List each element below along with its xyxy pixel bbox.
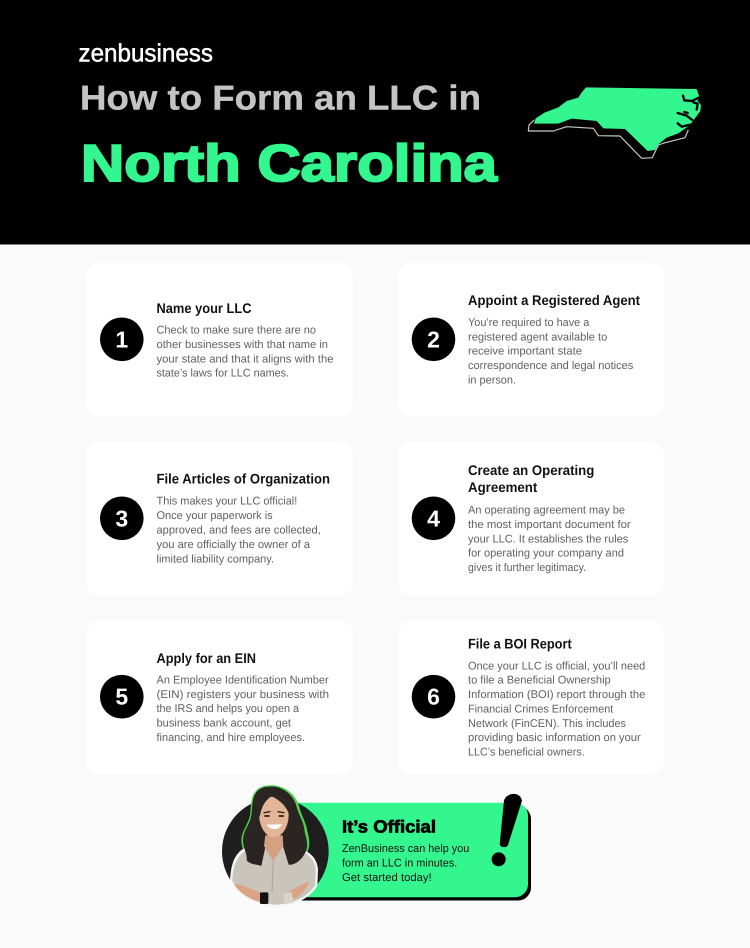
- step 2 body: in person.: [468, 374, 516, 386]
- callout text: form an LLC in minutes.: [342, 858, 457, 870]
- title line: How to Form an LLC in: How to Form an LLC in: [80, 79, 481, 117]
- step 4 body: your LLC. It establishes the rules: [468, 533, 629, 545]
- header panel: [0, 0, 750, 244]
- step 4 body: for operating your company and: [468, 548, 624, 560]
- step 4 body: An operating agreement may be: [468, 505, 625, 517]
- step 4 number: [412, 496, 455, 540]
- step 5 number: 5: [115, 684, 128, 710]
- step 5 card: [86, 620, 353, 774]
- step 5 body: (EIN) registers your business with: [156, 689, 329, 701]
- logo: zenbusiness: zenbusiness: [78, 40, 213, 68]
- callout panel: [280, 803, 531, 900]
- step 5 heading: Apply for an EIN: [156, 650, 256, 666]
- step 1 heading: Name your LLC: [156, 300, 252, 316]
- step 1 body: [156, 324, 334, 379]
- neck: [264, 835, 283, 861]
- step 6 body: Network (FinCEN). This includes: [468, 718, 626, 730]
- exclamation mark: [492, 794, 522, 866]
- callout text: [342, 843, 469, 884]
- step 6 heading: File a BOI Report: [468, 636, 572, 652]
- step 2 number: 2: [427, 326, 440, 352]
- step 3 heading: File Articles of Organization: [156, 470, 330, 486]
- step 2 number: [412, 318, 455, 361]
- step 2 heading: Appoint a Registered Agent: [468, 292, 640, 308]
- step 6 body: Once your LLC is official, you’ll need: [468, 660, 645, 672]
- shirt: [230, 844, 318, 907]
- step 6 card: [398, 620, 664, 774]
- step 4 heading: [468, 462, 594, 495]
- step 5 body: the IRS and helps you open a: [156, 703, 300, 715]
- step 1 card: [86, 262, 353, 416]
- step 6 body: Information (BOI) report through the: [468, 689, 645, 701]
- step 5 body: [156, 674, 329, 744]
- step 1 body: your state and that it aligns with the: [156, 353, 334, 365]
- step 1 body: state’s laws for LLC names.: [156, 367, 289, 379]
- step 5 number: [100, 675, 144, 718]
- callout text: ZenBusiness can help you: [342, 843, 469, 855]
- step 3 body: limited liability company.: [156, 553, 274, 565]
- step 6 body: LLC’s beneficial owners.: [468, 746, 585, 758]
- map: North Carolina: [528, 87, 701, 158]
- step 2 body: You’re required to have a: [468, 317, 590, 329]
- step 3 number: 3: [115, 505, 128, 531]
- step 2 body: registered agent available to: [468, 331, 607, 343]
- callout: [222, 785, 531, 907]
- step 6 body: [468, 660, 645, 758]
- step 4 body: gives it further legitimacy.: [468, 562, 586, 574]
- step 4 body: [468, 505, 631, 574]
- portrait: [222, 785, 329, 907]
- step 5 body: An Employee Identification Number: [156, 674, 329, 686]
- step 4 card: [398, 442, 664, 596]
- step 3 body: you are officially the owner of a: [156, 539, 311, 551]
- step 3 body: approved, and fees are collected,: [156, 524, 321, 536]
- step 4 heading: Create an Operating: [468, 462, 594, 478]
- arms: [234, 884, 263, 903]
- step 1 body: other businesses with that name in: [156, 339, 328, 351]
- step 3 card: [86, 442, 353, 596]
- step 6 body: to file a Beneficial Ownership: [468, 675, 611, 687]
- step 3 number: [100, 496, 144, 540]
- face: [259, 797, 289, 837]
- callout heading: It’s Official: [342, 817, 436, 837]
- step 1 number: 1: [115, 326, 128, 352]
- step 4 body: the most important document for: [468, 519, 631, 531]
- step 2 body: [468, 317, 634, 386]
- step 6 body: Financial Crimes Enforcement: [468, 703, 614, 715]
- step 5 body: business bank account, get: [156, 717, 292, 729]
- step 3 body: Once your paperwork is: [156, 510, 273, 522]
- step 3 body: [156, 495, 321, 565]
- step 2 body: correspondence and legal notices: [468, 360, 634, 372]
- step 6 number: 6: [427, 684, 440, 710]
- step 6 body: providing basic information on your: [468, 732, 641, 744]
- callout text: Get started today!: [342, 872, 432, 884]
- step 3 body: This makes your LLC official!: [156, 495, 297, 507]
- step 4 heading: Agreement: [468, 479, 538, 495]
- step 4 number: 4: [427, 505, 440, 531]
- step 2 card: [398, 262, 664, 416]
- step 6 number: [412, 675, 455, 718]
- step 2 body: receive important state: [468, 345, 582, 357]
- step 1 number: [100, 318, 144, 361]
- hair: [243, 787, 307, 866]
- title line: North Carolina: North Carolina: [81, 135, 498, 193]
- step 1 body: Check to make sure there are no: [156, 324, 316, 336]
- step 5 body: financing, and hire employees.: [156, 732, 305, 744]
